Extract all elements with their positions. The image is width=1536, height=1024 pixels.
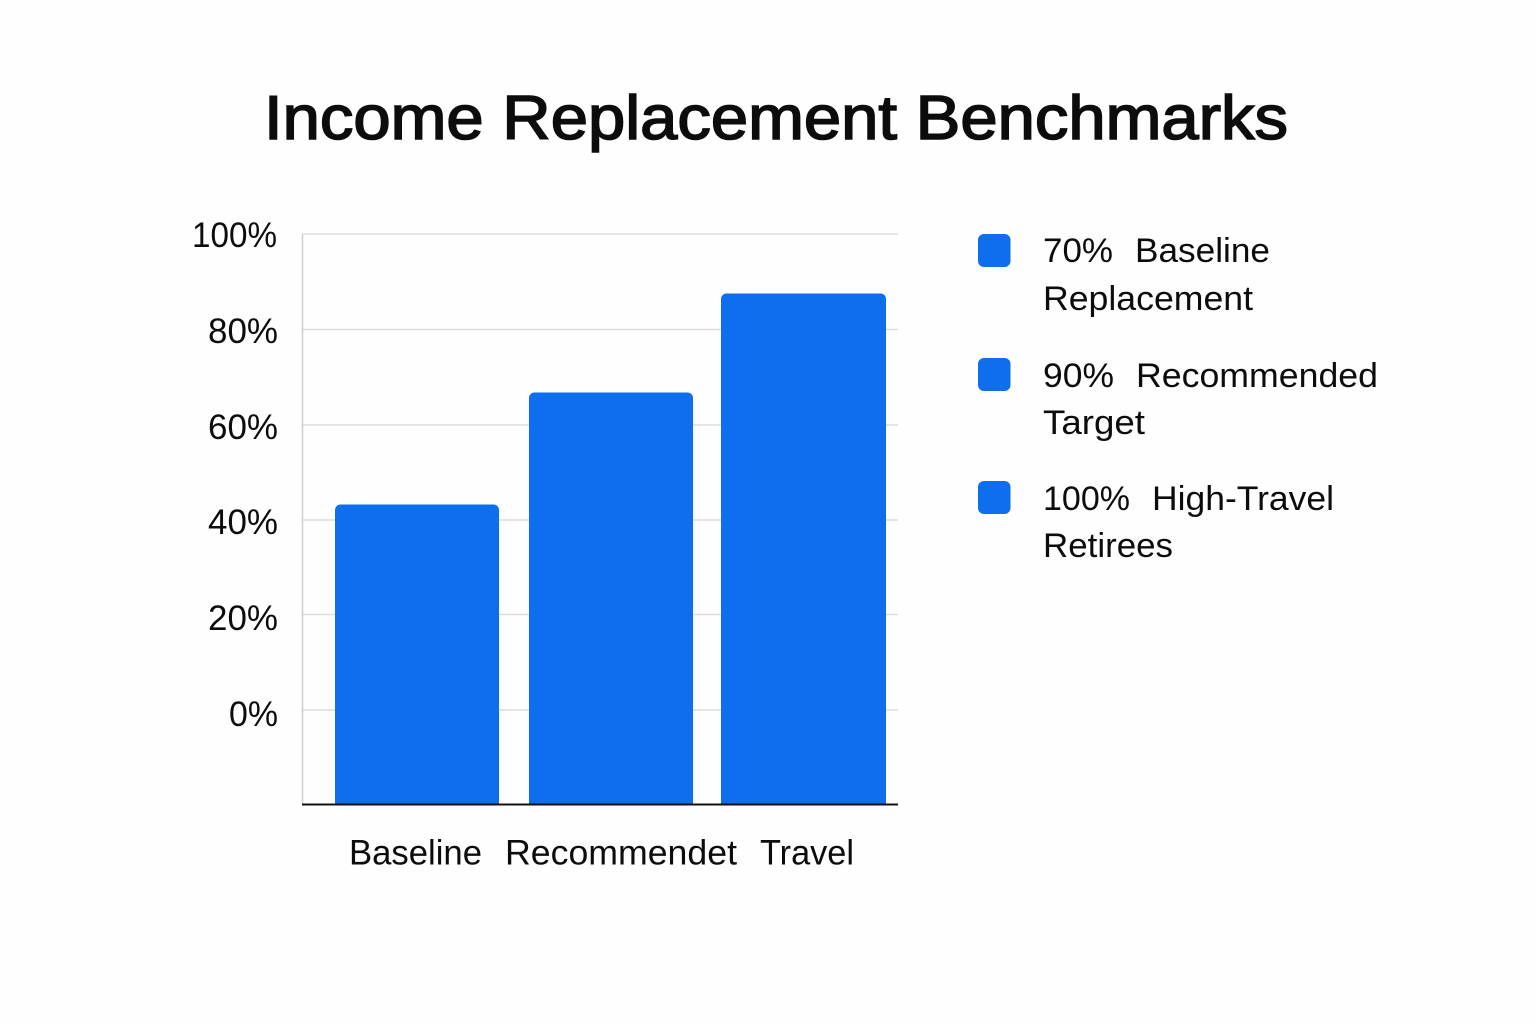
- legend item: 70% baseline replacement: 70%: [1043, 232, 1113, 270]
- y axis labels: 20%: [208, 599, 278, 638]
- title: Income Replacement Benchmarks: [264, 84, 1288, 153]
- legend item: 70% baseline replacement: Replacement: [1043, 280, 1253, 318]
- legend item: 70% baseline replacement: [978, 232, 1270, 318]
- legend item: 100% high-travel retirees: [978, 480, 1334, 565]
- y axis labels: 40%: [208, 503, 278, 542]
- x axis labels: Travel: [760, 834, 854, 872]
- legend item: 100% high-travel retirees: High-Travel: [1152, 480, 1334, 518]
- y axis labels: 0%: [229, 695, 278, 734]
- legend item: 100% high-travel retirees: 100%: [1043, 480, 1130, 518]
- bar chart: [192, 216, 898, 872]
- x axis labels: Recommendet: [505, 834, 737, 872]
- x axis labels: Baseline: [349, 834, 482, 872]
- legend item: 90% recommended target: Recommended: [1136, 357, 1378, 395]
- x axis labels: [349, 834, 854, 872]
- legend item: 90% recommended target: [978, 357, 1378, 442]
- bar: Recommended: [529, 392, 693, 804]
- legend item: 90% recommended target: Target: [1043, 404, 1145, 442]
- legend item: 90% recommended target: 90%: [1043, 357, 1114, 395]
- bar: Baseline: [335, 504, 499, 804]
- y axis labels: 80%: [208, 312, 278, 351]
- legend item: 70% baseline replacement: Baseline: [1135, 232, 1270, 270]
- legend item: 100% high-travel retirees: Retirees: [1043, 527, 1173, 565]
- y axis labels: 60%: [208, 408, 278, 447]
- y axis labels: 100%: [192, 216, 277, 255]
- legend: [978, 232, 1378, 565]
- bar: Travel: [721, 294, 886, 804]
- y axis labels: [192, 216, 278, 734]
